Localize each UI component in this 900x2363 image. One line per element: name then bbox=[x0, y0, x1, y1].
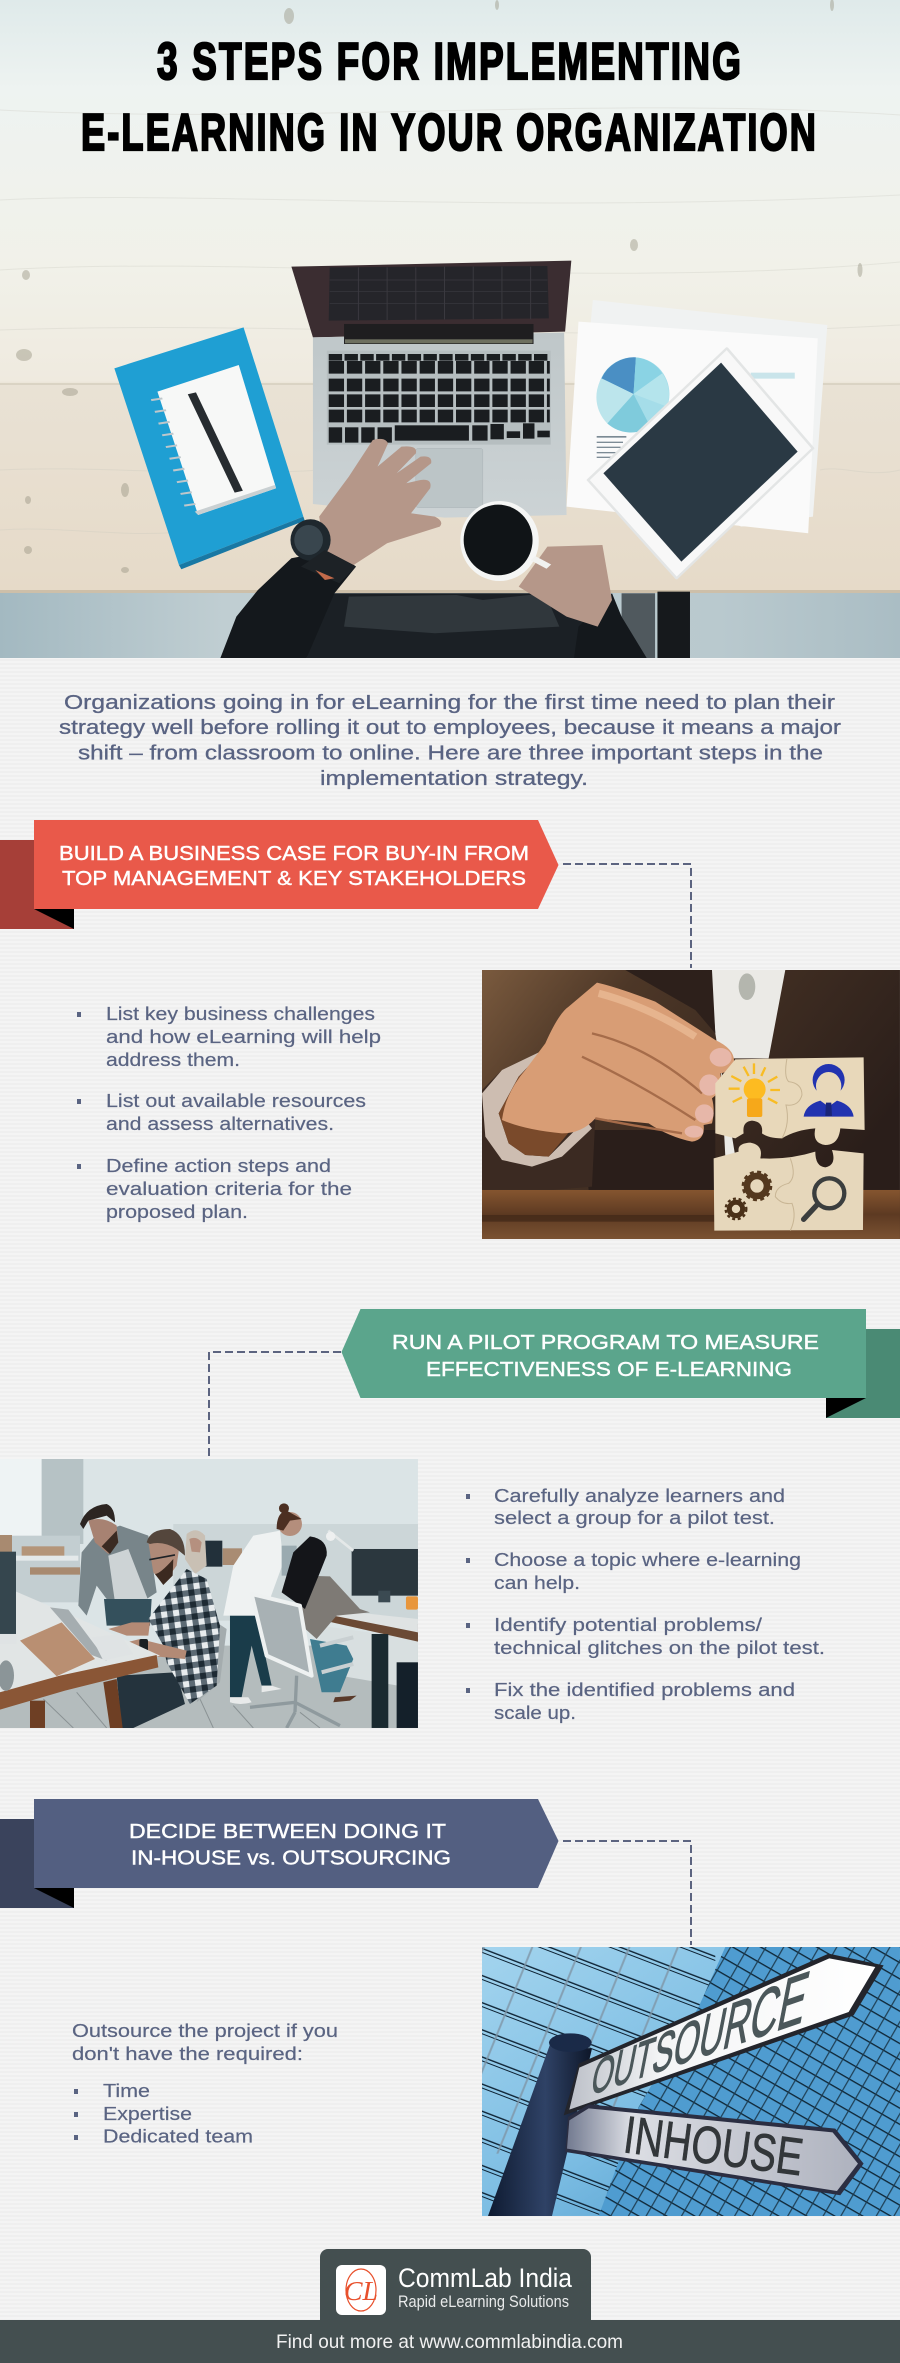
step 3 text and list bbox=[72, 2020, 338, 2146]
step 2 bullet list: Carefully analyze learners and bbox=[494, 1485, 785, 1506]
man standing bbox=[78, 1526, 157, 1616]
step 2 bullet list bbox=[466, 1485, 825, 1723]
step 1 bullet list bbox=[77, 1003, 381, 1222]
step 1 banner: TOP MANAGEMENT & KEY STAKEHOLDERS bbox=[62, 868, 526, 890]
step 3 text and list: Dedicated team bbox=[103, 2126, 253, 2146]
step 2 photo: team in office bbox=[0, 1459, 418, 1728]
dashed connector 2 bbox=[209, 1352, 341, 1458]
step 1 bullet list: evaluation criteria for the bbox=[106, 1178, 352, 1199]
footer bar: Find out more at www.commlabindia.com bbox=[276, 2331, 623, 2353]
hand bbox=[502, 983, 734, 1142]
step 1 bullet list: List out available resources bbox=[106, 1090, 366, 1111]
person: torso, sleeves and chair legs bbox=[220, 550, 690, 660]
footer logo box bbox=[320, 2249, 591, 2329]
step 1 bullet list: and how eLearning will help bbox=[106, 1026, 381, 1047]
intro paragraph: Organizations going in for eLearning for the first time need to plan their bbox=[64, 692, 835, 714]
step 2 bullet list: Choose a topic where e-learning bbox=[494, 1549, 801, 1570]
step 3 banner: DECIDE BETWEEN DOING IT bbox=[129, 1821, 446, 1843]
intro paragraph: shift – from classroom to online. Here are three important steps in the bbox=[78, 742, 823, 764]
step 3 banner bbox=[0, 1799, 558, 1908]
hand on trackpad and watch bbox=[290, 439, 441, 583]
step 2 bullet list: Fix the identified problems and bbox=[494, 1679, 795, 1700]
title bbox=[82, 41, 814, 152]
step 1 banner: BUILD A BUSINESS CASE FOR BUY-IN FROM bbox=[59, 843, 529, 865]
step 3 photo: outsource / inhouse signpost bbox=[482, 1947, 900, 2216]
step 1 photo: hand placing puzzle pieces bbox=[482, 970, 900, 1239]
step 2 bullet list: technical glitches on the pilot test. bbox=[494, 1637, 825, 1658]
step 2 banner: EFFECTIVENESS OF E-LEARNING bbox=[426, 1359, 792, 1381]
seated woman and standing woman bbox=[230, 1616, 272, 1697]
step 1 bullet list: and assess alternatives. bbox=[106, 1113, 334, 1134]
step 1 banner bbox=[0, 820, 558, 929]
step 3 text and list: Time bbox=[103, 2080, 150, 2101]
step 2 bullet list: select a group for a pilot test. bbox=[494, 1507, 775, 1528]
outsource sign: OUTSOURCE bbox=[586, 1955, 815, 2112]
chair of seated man bbox=[197, 1622, 227, 1702]
papers with pie chart bbox=[567, 300, 827, 533]
footer bar bbox=[0, 2320, 900, 2363]
step 2 bullet list: can help. bbox=[494, 1572, 580, 1593]
woman in back bbox=[185, 1530, 207, 1574]
hero objects, drawn in zoom units bbox=[114, 261, 827, 660]
step 3 banner: IN-HOUSE vs. OUTSOURCING bbox=[131, 1848, 451, 1870]
shirt cuff bbox=[482, 1050, 592, 1167]
seated man with plaid shirt bbox=[117, 1672, 185, 1728]
blue notebook bbox=[114, 327, 305, 569]
intro paragraph: strategy well before rolling it out to employees, because it means a major bbox=[59, 717, 841, 739]
hero photo: desk with laptop bbox=[0, 0, 900, 660]
step 1 bullet list: List key business challenges bbox=[106, 1003, 375, 1024]
coffee cup and hand bbox=[460, 501, 612, 627]
logo mark: CL bbox=[344, 2276, 378, 2306]
intro paragraph: implementation strategy. bbox=[320, 768, 588, 790]
step 2 banner: RUN A PILOT PROGRAM TO MEASURE bbox=[392, 1332, 819, 1354]
step 2 banner bbox=[342, 1309, 900, 1418]
dashed connector 1 bbox=[563, 864, 691, 968]
laptop bbox=[291, 261, 571, 518]
step 3 text and list: Outsource the project if you bbox=[72, 2020, 338, 2041]
logo mark bbox=[336, 2265, 386, 2315]
step 2 bullet list: Identify potential problems/ bbox=[494, 1614, 763, 1635]
dashed connector 3 bbox=[563, 1841, 691, 1945]
step 3 text and list: don't have the required: bbox=[72, 2043, 303, 2064]
step 2 bullet list: scale up. bbox=[494, 1702, 576, 1723]
wooden desk and laptop bbox=[0, 1552, 160, 1728]
intro paragraph bbox=[59, 692, 841, 790]
monitor and right desk bbox=[205, 1531, 418, 1728]
step 1 bullet list: Define action steps and bbox=[106, 1155, 331, 1176]
post bbox=[488, 2044, 592, 2216]
puzzle pieces bbox=[714, 1057, 865, 1231]
footer logo box: CommLab India bbox=[398, 2263, 573, 2293]
inhouse sign: INHOUSE bbox=[620, 2105, 807, 2187]
step 1 bullet list: address them. bbox=[106, 1049, 240, 1070]
step 1 bullet list: proposed plan. bbox=[106, 1201, 248, 1222]
tablet bbox=[588, 348, 813, 578]
people bbox=[78, 1503, 370, 1728]
footer logo box: Rapid eLearning Solutions bbox=[398, 2292, 569, 2311]
step 3 text and list: Expertise bbox=[103, 2103, 192, 2124]
